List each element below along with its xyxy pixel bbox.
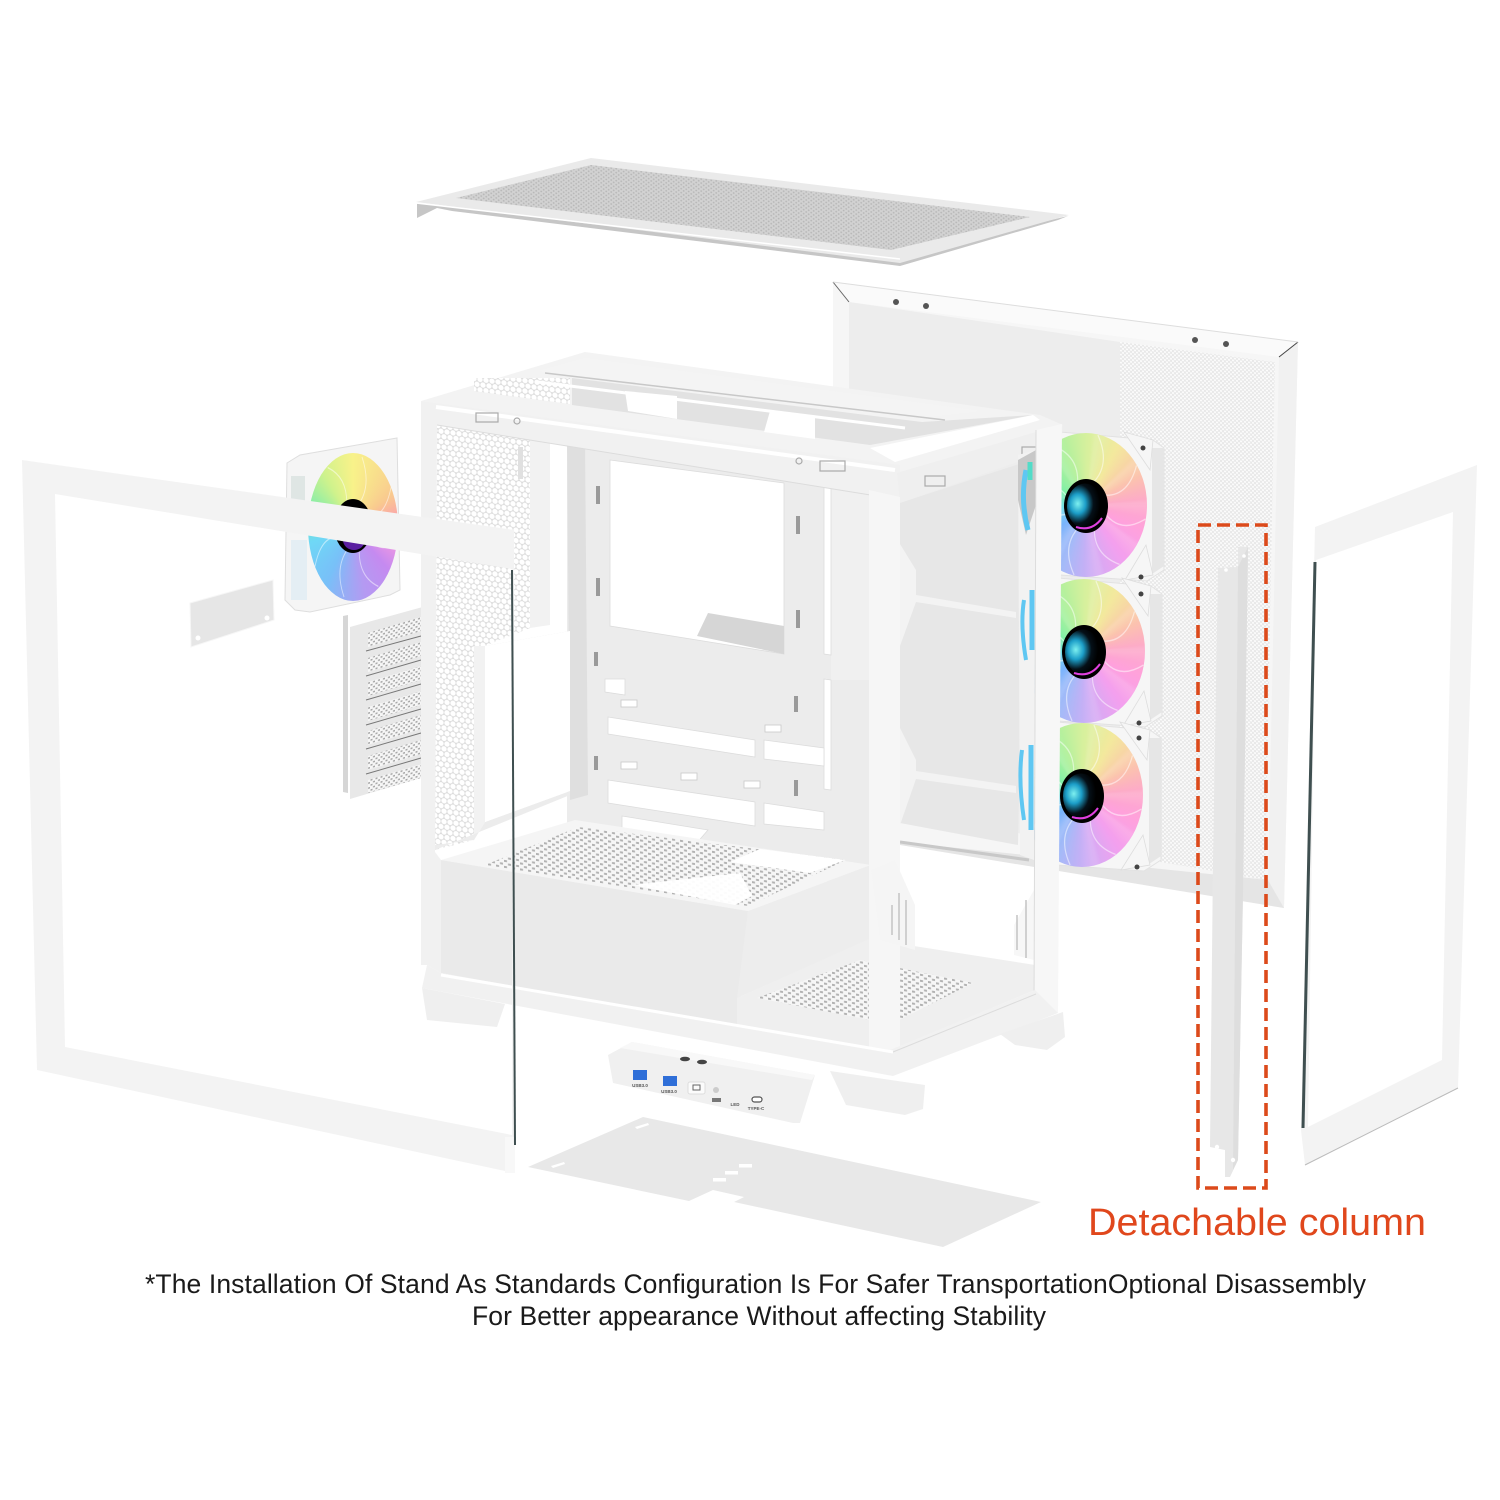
back side panel [833,282,1298,908]
case feet [422,988,1065,1115]
audio jack [713,1087,719,1093]
USB ports [633,1070,647,1080]
dashed highlight box [1198,525,1266,1188]
cooling fan: right top [1025,432,1164,581]
type-c port [752,1097,762,1102]
front IO port block: USB3.0 [661,1089,677,1094]
tray slot marks [621,700,781,788]
vent cover plate [190,580,274,647]
side interior details [900,450,1036,860]
top frame and openings [421,352,1063,473]
front IO port block: TYPE-C [748,1106,765,1111]
top panel perforated area [456,165,1030,250]
rail marks [476,413,1038,486]
back panel perforated area [1120,342,1275,880]
PSU shroud [441,820,871,1030]
top mesh panel [416,158,1069,266]
tray cutouts [605,460,831,845]
bottom fan tray [737,939,1035,1050]
rear mesh wall [435,424,570,850]
motherboard tray [567,430,870,890]
cooling fan: right bottom [1021,722,1161,871]
detachable column [1210,547,1248,1177]
PCI expansion slot covers [343,600,448,799]
callout label: detachable column: Detachable column [1088,1202,1426,1244]
PC case chassis [421,352,1065,1115]
slot rows [368,617,421,793]
front top rail [421,401,900,498]
cooling fan: left rear [285,438,400,612]
cooling fan: right middle [1023,578,1162,727]
front IO port block: USB3.0 [632,1083,648,1088]
front IO port block [608,1042,815,1123]
footnote text [145,1269,1367,1331]
right glass side panel [1301,465,1477,1165]
right front pillar [1034,424,1062,1013]
left front pillar [421,402,441,973]
footnote text: *The Installation Of Stand As Standards Configuration Is For Safer TransportationOptional Disassembly [145,1269,1367,1299]
footnote text: For Better appearance Without affecting Stability [472,1301,1047,1331]
bottom dust plate [528,1117,1041,1247]
left glass side panel [22,460,515,1173]
right side strut [871,860,1034,960]
power button [688,1082,705,1094]
center front pillar [869,490,900,1050]
LED label: LED [730,1102,740,1107]
base rail [422,965,1058,1076]
right top rail [897,424,1063,503]
